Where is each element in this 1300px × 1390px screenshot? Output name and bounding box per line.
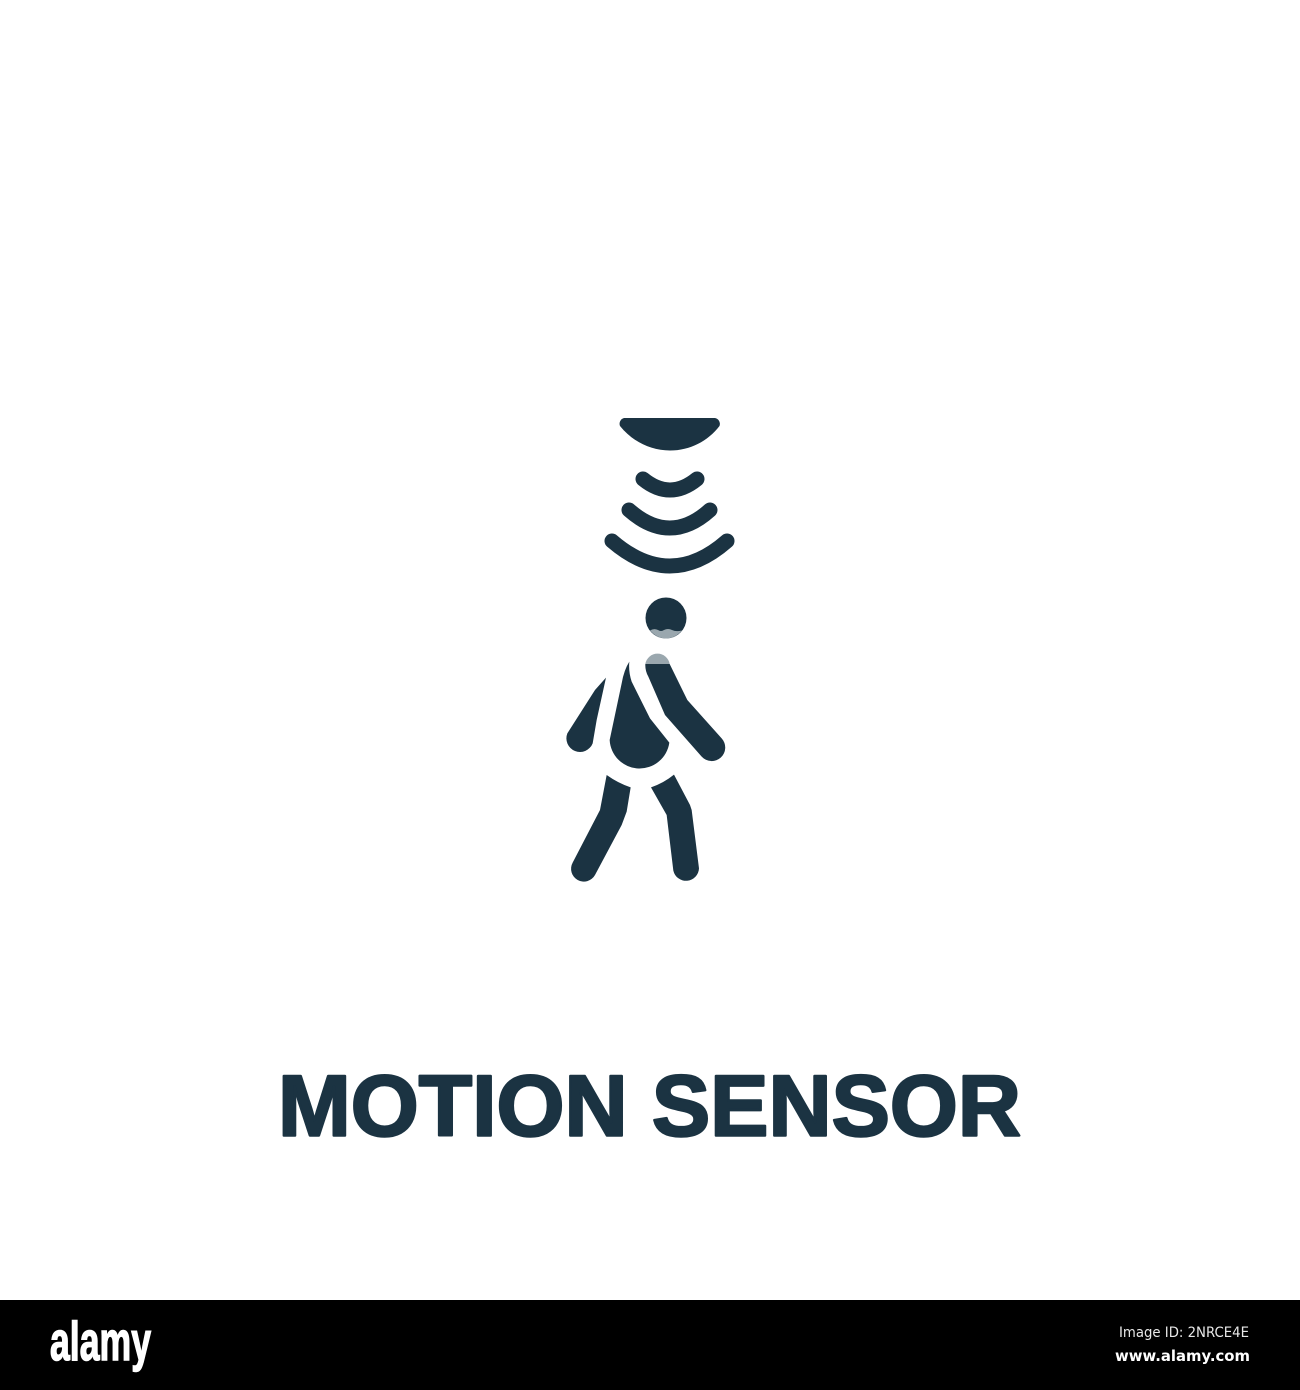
logo: alamy: alamy — [50, 1310, 151, 1372]
right arm — [645, 664, 725, 761]
website url: www.alamy.com — [1115, 1347, 1250, 1365]
left arm — [566, 678, 606, 752]
icon: sensor dome — [620, 418, 720, 450]
icon: person body — [566, 654, 725, 882]
image id: Image ID: 2NRCE4E — [1119, 1325, 1249, 1341]
icon: sensor waves — [612, 479, 727, 566]
footer bar — [0, 1300, 1300, 1390]
arm highlight — [645, 654, 670, 664]
icon: motion sensor with walking person — [566, 418, 727, 882]
torso — [610, 662, 669, 768]
title: MOTION SENSOR — [278, 1058, 1021, 1154]
left leg — [571, 775, 631, 882]
right leg — [651, 775, 699, 881]
icon: person head — [646, 598, 686, 638]
